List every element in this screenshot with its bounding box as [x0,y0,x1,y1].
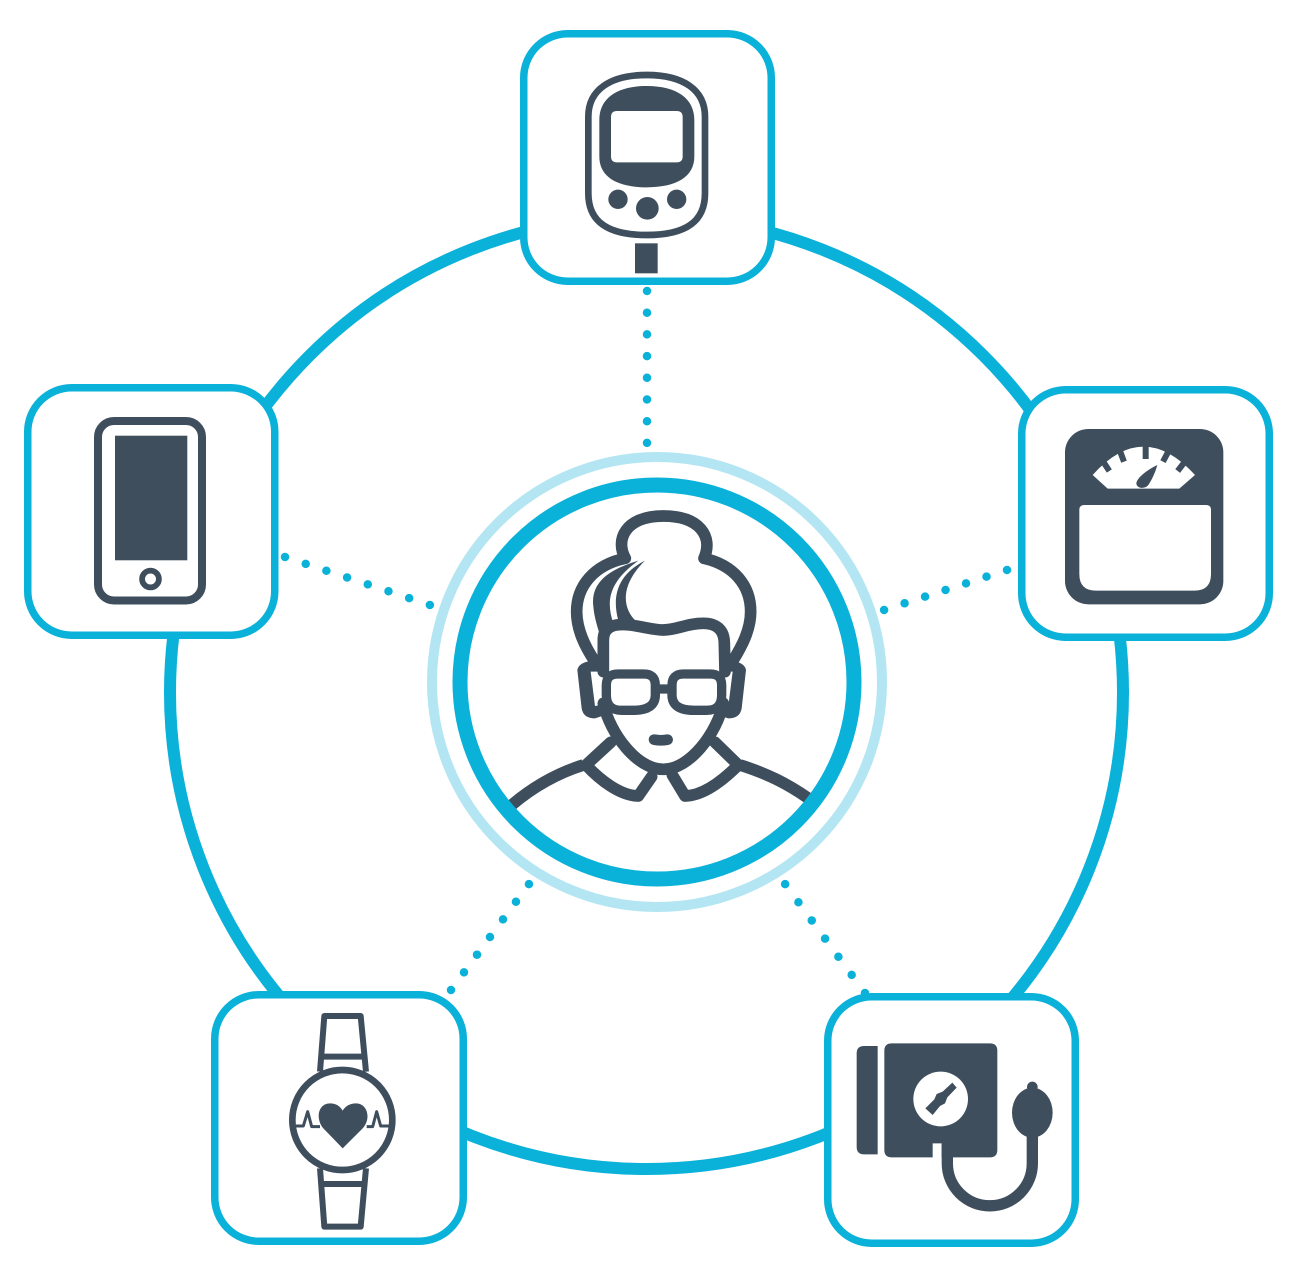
mouth [654,724,668,756]
panel: smartwatch [215,995,463,1241]
face [603,703,723,769]
centre light ring [432,457,882,907]
hair strands [593,561,645,640]
glasses [606,674,722,710]
panel: glucose meter [524,34,771,281]
icon: smartphone [98,421,202,600]
icon: smartwatch [292,1016,392,1227]
icon: glucose meter [588,75,705,273]
panel: smartphone [28,388,275,635]
collar [586,742,738,796]
ears [577,658,746,718]
shoulders [512,765,808,805]
hairline [603,623,725,672]
panel: blood pressure monitor [828,997,1075,1243]
icon: weighing scale [1065,429,1223,604]
panel: weighing scale [1022,390,1269,637]
outer ring [170,216,1123,1169]
icon: blood pressure monitor [857,1043,1053,1206]
hair and bun [577,516,751,662]
person avatar [512,516,808,805]
dotted connectors [285,291,1007,993]
centre ring [460,485,854,879]
